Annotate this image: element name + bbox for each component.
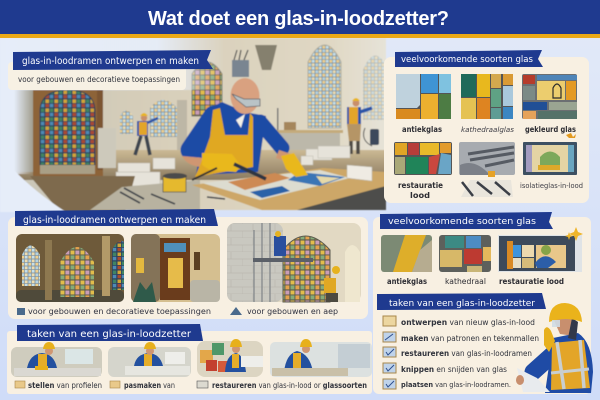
task: pasmaken van <box>108 342 191 390</box>
floor front <box>30 176 135 212</box>
ribbon heading <box>380 212 553 229</box>
task row 1: ontwerpen van nieuw glas-in-lood <box>401 318 535 327</box>
tile: antiekglas: antiekglas <box>387 277 427 286</box>
tile: restauratie lood <box>498 235 582 286</box>
tile: gekleurd glas <box>522 74 577 134</box>
tile: antiekglas: antiekglas <box>402 125 442 134</box>
task: stellen van profielen <box>11 342 102 390</box>
panel: glass types and tasks (right) <box>373 212 593 394</box>
tile: antiekglas <box>396 74 451 134</box>
left swoosh <box>0 90 66 212</box>
title bar: Wat doet een glas-in-loodzetter? <box>148 8 449 30</box>
tile: restauratie lood: lood <box>410 191 430 200</box>
caption plate <box>8 62 186 90</box>
panel: designing and making windows <box>8 209 368 319</box>
workbench <box>90 180 200 210</box>
worker left <box>135 113 158 155</box>
tile: antiekglas <box>381 235 432 286</box>
task row 5: plaatsen van glas-in-loodramen. <box>401 381 511 389</box>
hero illustration: glazier workshop <box>0 38 386 212</box>
top stained-glass window <box>192 62 222 116</box>
task checklist <box>383 316 539 389</box>
task: pasmaken van: pasmaken van <box>124 381 175 390</box>
top fade <box>0 38 225 90</box>
ribbon heading: tasks: taken van een glas-in-loodzetter <box>389 299 535 309</box>
tile: isolatieglas-in-lood: isolatieglas-in-lood <box>520 182 583 190</box>
background arched windows <box>98 100 187 168</box>
ribbon heading: veelvoorkomende soorten glas <box>388 217 536 227</box>
tile: lead profiles <box>459 142 515 197</box>
left stained-glass window <box>14 90 103 178</box>
task row 2: maken van patronen en tekenmallen <box>401 334 539 343</box>
caption with icon: voor gebouwen en aep <box>247 307 338 316</box>
icon: gold sparkle <box>566 133 576 138</box>
side fade <box>14 90 32 174</box>
glass stack right of bench <box>347 165 372 181</box>
ribbon heading: veelvoorkomende soorten glas <box>401 55 534 65</box>
hand tools <box>120 188 225 204</box>
ribbon heading <box>15 209 218 226</box>
ribbon <box>13 50 213 70</box>
tile: restauratie lood: restauratie lood <box>499 277 564 286</box>
task: glass sorting <box>270 339 372 377</box>
title bar <box>0 0 600 38</box>
ribbon heading: glas-in-loodramen ontwerpen en maken <box>23 215 206 226</box>
ribbon heading: taken van een glas-in-loodzetter <box>27 329 191 340</box>
callout: hero heading: glas-in-loodramen ontwerpen en maken <box>22 56 199 67</box>
right tall window <box>308 45 341 128</box>
tile: restauratie lood <box>394 142 452 200</box>
picture: door with leaded glass <box>131 234 220 302</box>
shelf with jars <box>273 108 343 150</box>
tile: restauratie lood: restauratie <box>398 181 443 190</box>
tile: isolatieglas-in-lood <box>520 142 583 190</box>
ribbon heading: tasks <box>377 293 546 310</box>
flux tin <box>163 173 187 192</box>
worker with clipboard <box>516 303 593 393</box>
mosaic panel on bench <box>202 170 350 200</box>
icon: sparkles <box>565 227 583 241</box>
tile: kathedraal <box>439 235 491 286</box>
callout: hero heading <box>8 50 213 90</box>
task row 3: restaureren van glas-in-loodramen <box>401 349 532 358</box>
task row 4 <box>383 363 507 374</box>
picture: scaffold at window <box>227 223 361 302</box>
ribbon heading <box>17 324 203 341</box>
tile: kathedraal: kathedraal <box>445 277 486 286</box>
tile: kathedraalglas: kathedraalglas <box>461 126 514 134</box>
main glazier <box>182 78 308 180</box>
picture: church interior <box>16 234 124 302</box>
panel: tasks of a glazier (bottom) <box>7 324 372 394</box>
task row 5 <box>383 379 511 389</box>
tile: kathedraalglas <box>461 74 514 134</box>
caption with icon: voor gebouwen en decoratieve toepassingen <box>28 307 211 316</box>
stone blocks <box>116 146 350 186</box>
tile: gekleurd glas: gekleurd glas <box>525 125 576 134</box>
tool rack <box>232 45 277 77</box>
panel: common glass types (top) <box>384 50 589 203</box>
worker right <box>347 98 379 154</box>
task: restaureren <box>197 339 367 390</box>
task: stellen van profielen: stellen van profielen <box>28 381 102 390</box>
caption text: voor gebouwen en decoratieve toepassingen <box>18 75 180 84</box>
task: restaureren: restaureren van glas-in-lood or glassoorten <box>212 381 367 390</box>
task row 4: knippen en snijden van glas <box>401 365 507 374</box>
ribbon heading <box>395 50 543 67</box>
